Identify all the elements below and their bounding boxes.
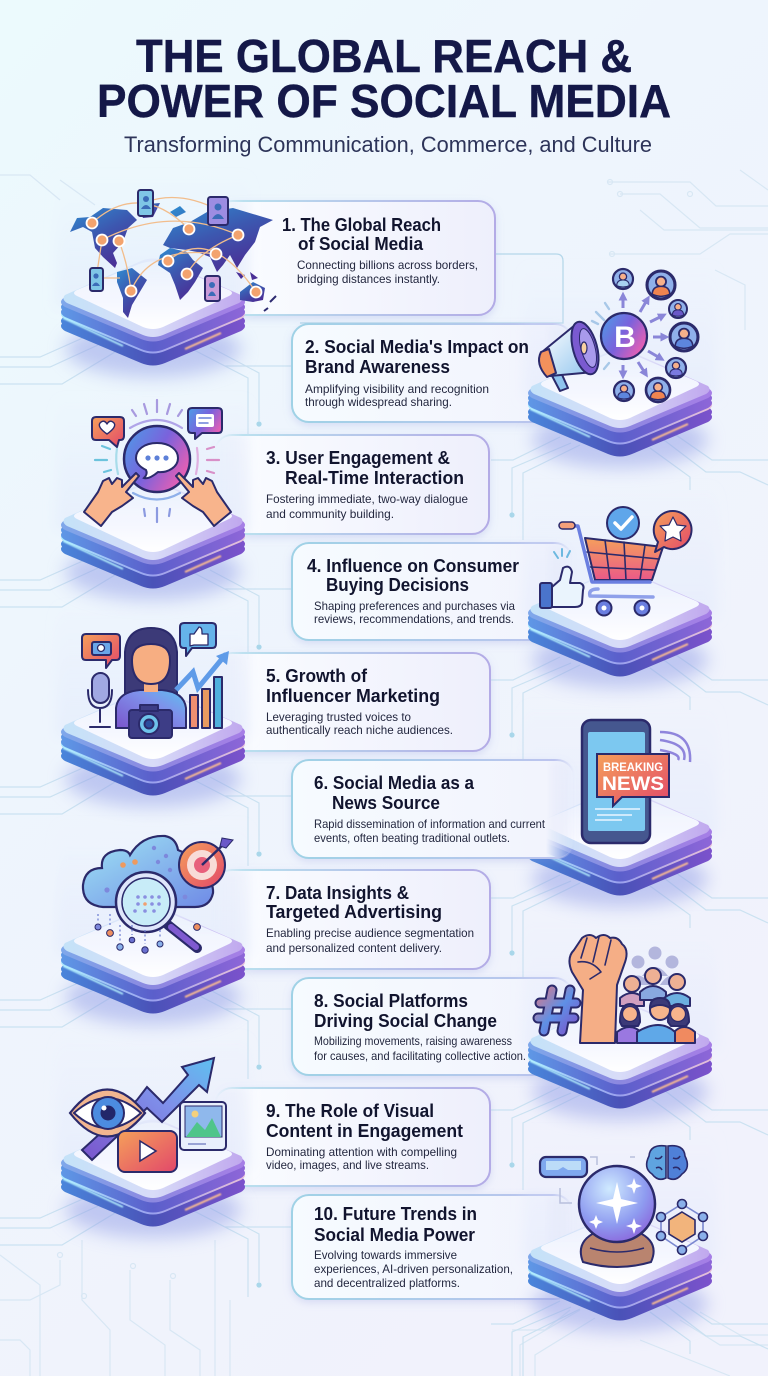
panel: 3 engagement	[56, 395, 489, 600]
panel: 9 visual content	[56, 1033, 490, 1238]
panel: 6 news source	[292, 702, 717, 907]
heading 7: Targeted Advertising	[266, 902, 442, 922]
text 4	[314, 599, 515, 626]
heading 9: 9. The Role of Visual	[266, 1101, 434, 1121]
text 3	[266, 492, 468, 521]
panel: 5 influencer marketing	[56, 602, 490, 807]
panel: 7 data insights	[56, 820, 490, 1025]
heading 5: 5. Growth of	[266, 666, 368, 686]
icon: breaking news phone	[582, 720, 690, 843]
panel: 1 global reach	[56, 172, 495, 377]
card 3	[215, 435, 489, 534]
heading 3: Real-Time Interaction	[285, 468, 464, 488]
text 4: reviews, recommendations, and trends.	[314, 612, 514, 626]
text 6: events, often beating traditional outlets.	[314, 831, 510, 845]
text 8: for causes, and facilitating collective action.	[314, 1049, 526, 1063]
platform 8	[523, 915, 717, 1120]
panel: 4 consumer decisions	[292, 483, 717, 688]
platform 9	[56, 1033, 250, 1238]
icon: shopping cart	[559, 507, 691, 616]
text 2	[305, 382, 489, 409]
platform 6	[523, 702, 717, 907]
heading 4: Buying Decisions	[326, 575, 469, 595]
text 5: Leveraging trusted voices to	[266, 710, 411, 724]
heading 6: News Source	[332, 793, 440, 813]
heading 4: 4. Influence on Consumer	[307, 556, 519, 576]
heading 7	[266, 883, 442, 922]
icon: influencer	[82, 623, 229, 738]
text 10: experiences, AI-driven personalization,	[314, 1262, 513, 1276]
icon: world map	[70, 190, 276, 318]
heading 3: 3. User Engagement &	[266, 448, 450, 468]
heading 4	[307, 556, 519, 595]
title: POWER OF SOCIAL MEDIA	[97, 75, 671, 127]
card 2	[292, 324, 572, 422]
icon: thumbs up	[540, 549, 584, 608]
heading 9	[266, 1101, 463, 1141]
heading 9: Content in Engagement	[266, 1121, 463, 1141]
heading 8: Driving Social Change	[314, 1011, 497, 1031]
heading 5	[266, 666, 440, 706]
platform 7	[56, 820, 250, 1025]
heading 8: 8. Social Platforms	[314, 991, 468, 1011]
text 8	[314, 1034, 526, 1063]
card 6	[292, 760, 574, 858]
icon: brand circle: B	[614, 321, 636, 354]
heading 5: Influencer Marketing	[266, 686, 440, 706]
text 10: Evolving towards immersive	[314, 1248, 457, 1262]
text 3: and community building.	[266, 507, 394, 521]
icon: breaking news phone: NEWS	[602, 773, 664, 795]
heading 3	[266, 448, 464, 488]
platform 4	[523, 483, 717, 688]
icon: crowd and fist	[538, 935, 695, 1043]
heading 10: 10. Future Trends in	[314, 1204, 477, 1224]
text 10: and decentralized platforms.	[314, 1276, 460, 1290]
text 9	[266, 1145, 457, 1172]
text 2: through widespread sharing.	[305, 395, 452, 409]
heading 1	[282, 215, 441, 254]
panel: 2 brand awareness	[292, 263, 717, 468]
icon: network cubes	[656, 1200, 708, 1254]
text 9: Dominating attention with compelling	[266, 1145, 457, 1159]
heading 10	[314, 1204, 477, 1245]
text 5	[266, 710, 453, 737]
panel: 8 social change	[292, 915, 717, 1120]
heading 6: 6. Social Media as a	[314, 773, 475, 793]
icon: VR goggles	[540, 1157, 587, 1177]
card 7	[215, 870, 490, 969]
card 4	[292, 543, 572, 640]
icon: crystal ball	[560, 1157, 655, 1267]
card 9	[215, 1088, 490, 1186]
text 7: Enabling precise audience segmentation	[266, 926, 474, 940]
platform 3	[56, 395, 250, 600]
icon: brand circle	[601, 313, 647, 359]
card 10	[292, 1195, 572, 1299]
card 8	[292, 978, 572, 1075]
text 1	[297, 258, 478, 286]
subtitle: Transforming Communication, Commerce, and Culture	[124, 132, 652, 157]
platform 5	[56, 602, 250, 807]
text 10	[314, 1248, 513, 1290]
text 9: video, images, and live streams.	[266, 1158, 429, 1172]
heading 2: Brand Awareness	[305, 357, 450, 377]
icon: breaking news phone: BREAKING	[603, 762, 663, 774]
heading 8	[314, 991, 497, 1031]
card 5	[215, 653, 490, 751]
panel: 10 future trends	[292, 1127, 717, 1332]
text 8: Mobilizing movements, raising awareness	[314, 1034, 512, 1048]
text 4: Shaping preferences and purchases via	[314, 599, 515, 613]
heading 7: 7. Data Insights &	[266, 883, 409, 903]
heading 1: of Social Media	[298, 234, 424, 254]
text 3: Fostering immediate, two-way dialogue	[266, 492, 468, 506]
icon: megaphone	[539, 319, 604, 391]
text 7	[266, 926, 474, 955]
title	[97, 30, 671, 127]
icon: data cloud and magnifier	[83, 836, 233, 953]
text 1: bridging distances instantly.	[297, 272, 440, 286]
icon: brain	[647, 1146, 687, 1179]
heading 2: 2. Social Media's Impact on	[305, 337, 529, 357]
text 7: and personalized content delivery.	[266, 941, 442, 955]
heading 2	[305, 337, 529, 377]
heading 6	[314, 773, 475, 813]
text 6: Rapid dissemination of information and current	[314, 817, 546, 831]
platform 10	[523, 1127, 717, 1332]
icon: chat ring with hands	[84, 400, 231, 526]
icon: audience	[592, 269, 698, 402]
title: THE GLOBAL REACH &	[136, 30, 632, 82]
heading 10: Social Media Power	[314, 1225, 475, 1245]
icon: eye, arrow and media	[70, 1058, 226, 1172]
text 5: authentically reach niche audiences.	[266, 723, 453, 737]
platform 1	[56, 172, 250, 377]
text 6	[314, 817, 546, 845]
heading 1: 1. The Global Reach	[282, 215, 441, 235]
text 1: Connecting billions across borders,	[297, 258, 478, 272]
platform 2	[523, 263, 717, 468]
card 1	[215, 201, 495, 315]
text 2: Amplifying visibility and recognition	[305, 382, 489, 396]
